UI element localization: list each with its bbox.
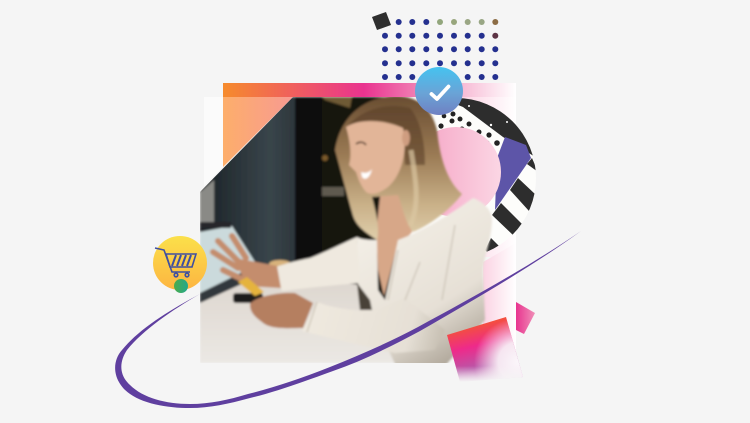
lower hand [250,293,313,328]
laptop bezel [200,280,242,304]
blurred room [322,97,402,302]
orange triangle [223,97,293,167]
green dot [174,279,188,293]
pink small square [516,302,535,334]
stripes [485,158,538,258]
dark column [294,97,324,262]
hair highlight [410,150,416,226]
white and pink backing panel [204,97,516,355]
dot grid [382,19,498,80]
ear [402,130,410,146]
dark gap by body [357,283,372,310]
black arc with speckles [458,98,533,156]
check badge [415,67,463,115]
hair [335,96,462,240]
eye [356,142,366,145]
dark hair top [346,106,425,165]
gradient top bar [223,83,516,97]
photo of woman at laptop [200,96,492,366]
patterned circle [435,98,536,252]
window strip [200,180,214,228]
upper sleeve [273,237,360,291]
infographic illustration [115,12,580,408]
face [346,121,405,194]
shopping cart badge [153,236,207,293]
desk [200,282,394,363]
lower sleeve [304,303,439,353]
neck and chest [376,194,414,296]
purple shape [495,137,531,210]
smile [361,169,372,179]
upper hand [213,236,281,288]
pastry [269,260,291,268]
black dots [438,112,500,146]
dark wall [200,97,300,302]
dark diamond accent [372,12,391,30]
check mark [432,86,448,99]
purple swoosh [115,231,581,408]
pink circle [436,127,501,216]
phone on desk [233,293,263,303]
jacket folds [307,225,455,332]
gradient square [447,317,523,384]
laptop screen [200,226,257,293]
cart icon [155,248,196,277]
jacket body [357,198,492,366]
bank card [238,277,264,296]
